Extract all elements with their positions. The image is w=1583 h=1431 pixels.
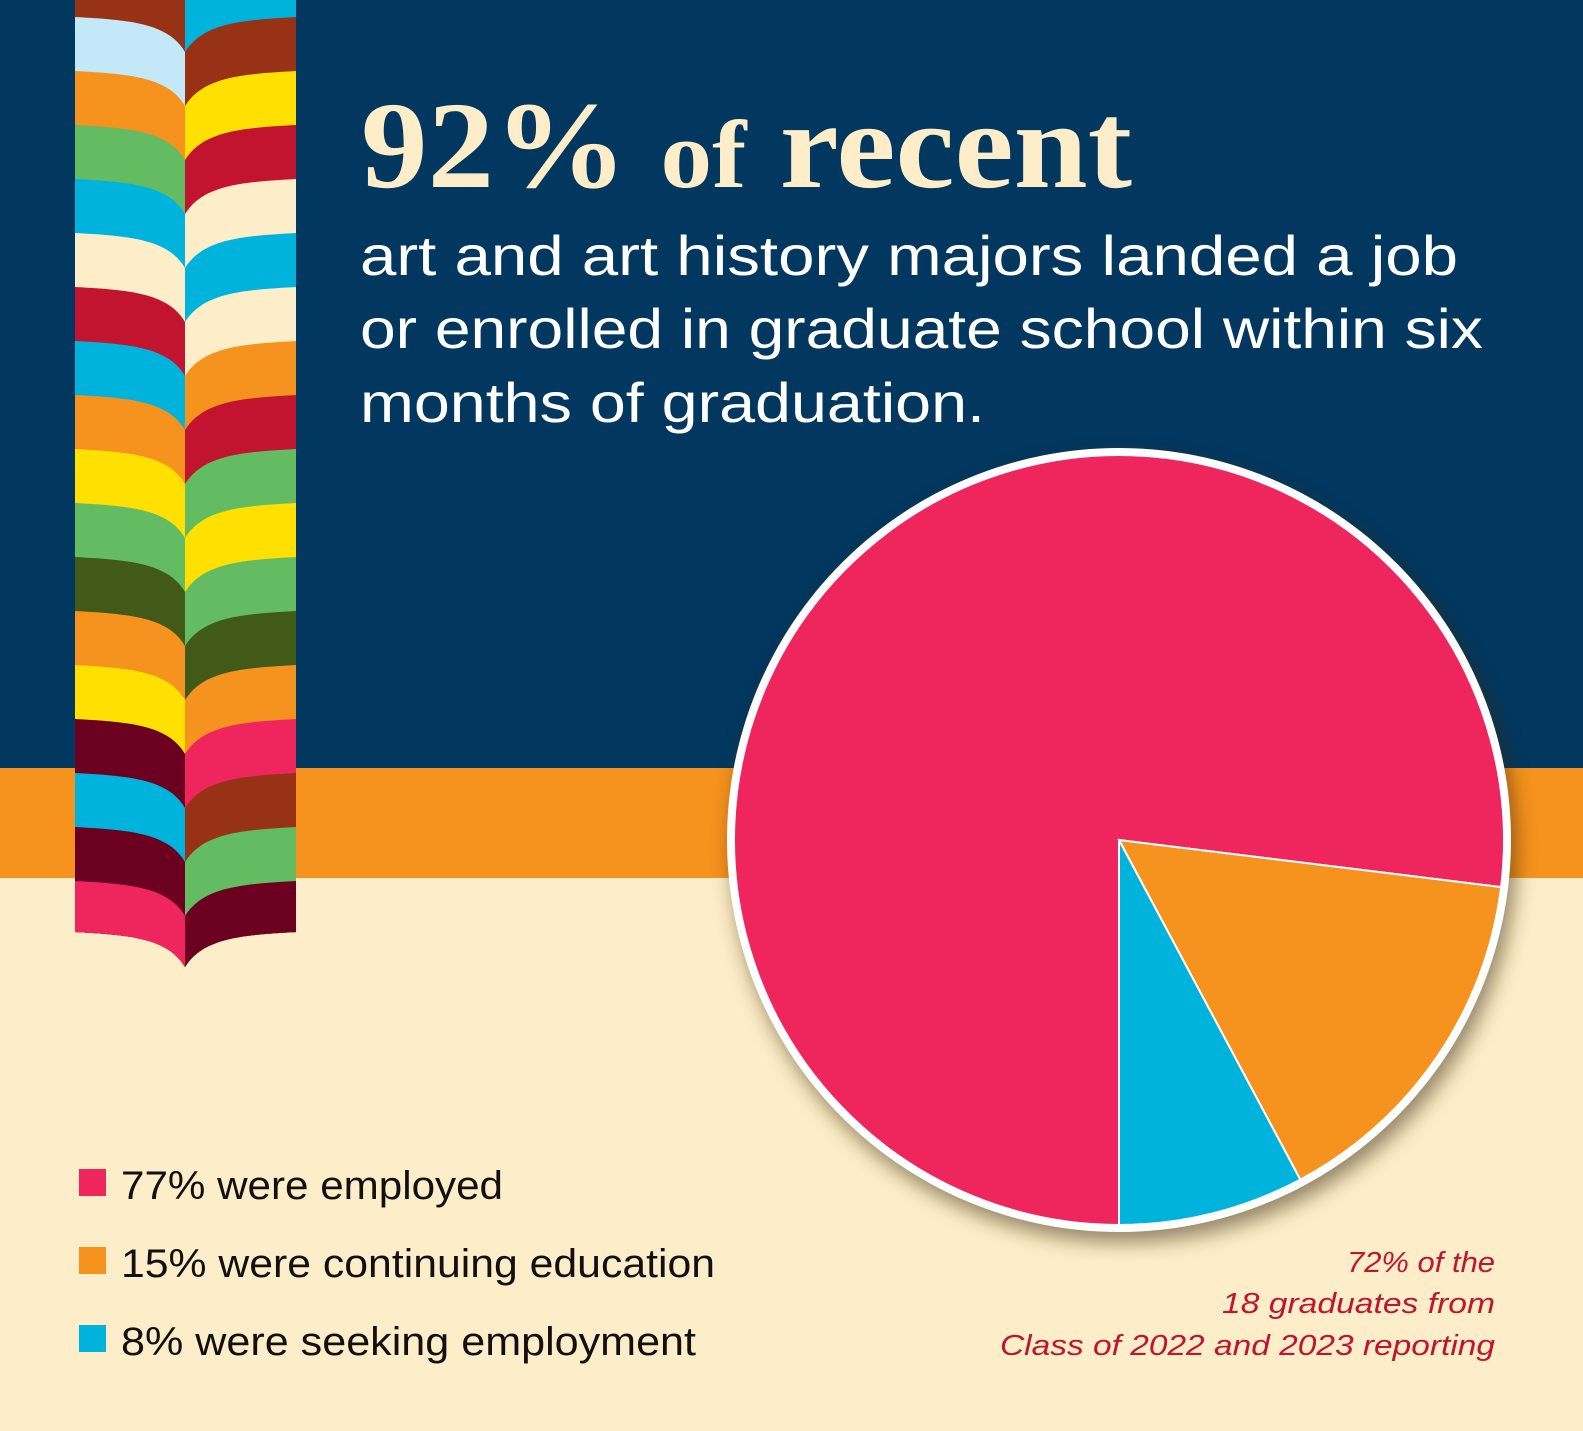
legend: [79, 1164, 715, 1364]
footnote: 18 graduates from: [1222, 1288, 1495, 1320]
footnote: 72% of the: [1347, 1247, 1495, 1279]
subtitle: months of graduation.: [360, 371, 985, 434]
background: navy: [0, 0, 1583, 768]
legend: 77% were employed: [121, 1164, 503, 1208]
slice: seeking employment 8%: [1119, 840, 1300, 1225]
title: 92% of recent: [361, 77, 1132, 214]
footnote: Class of 2022 and 2023 reporting: [1000, 1330, 1495, 1362]
pie chart: [727, 448, 1516, 1242]
background: orange band: [0, 768, 1583, 878]
slice: continuing education 15%: [1119, 840, 1501, 1180]
subtitle: [360, 224, 1483, 434]
footnote: [1000, 1247, 1495, 1362]
subtitle: or enrolled in graduate school within six: [360, 297, 1483, 360]
slice: employed 77%: [734, 455, 1504, 1225]
legend: 8% were seeking employment: [121, 1320, 696, 1364]
decorative ribbon: [75, 0, 296, 980]
legend: 15% were continuing education: [121, 1242, 715, 1286]
subtitle: art and art history majors landed a job: [360, 224, 1458, 287]
